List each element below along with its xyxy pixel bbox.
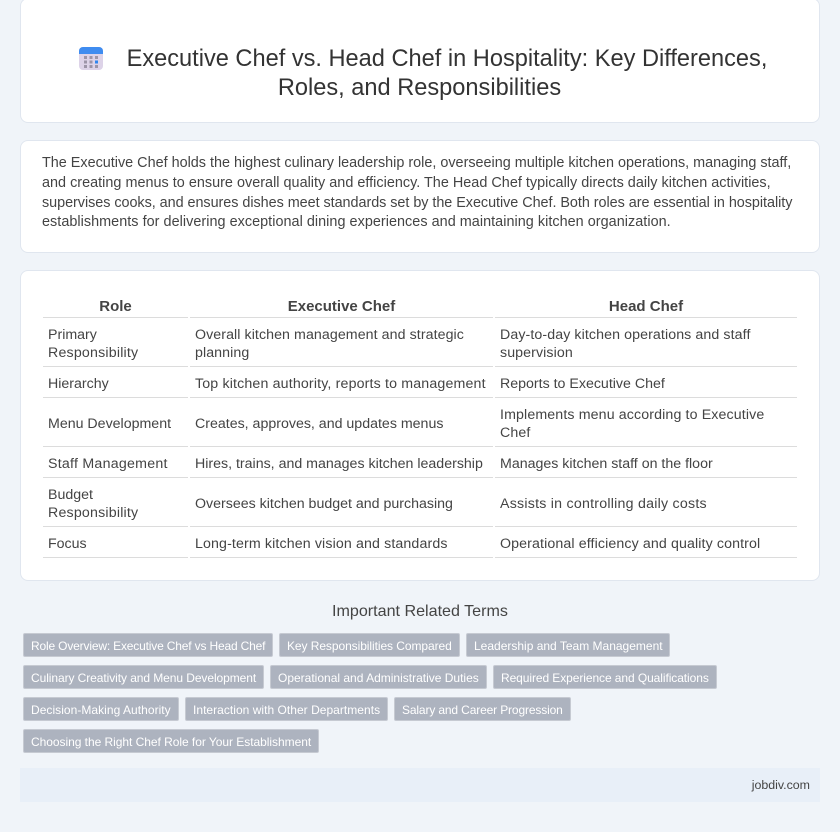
Head Chef: Menu Development: Chef — [500, 425, 530, 441]
related terms heading: Important Related Terms — [332, 602, 508, 620]
Executive Chef: Primary Responsibility: Overall kitchen management and strategic — [195, 327, 464, 343]
row: Focus: Focus — [48, 536, 87, 552]
tag — [279, 633, 460, 657]
Head Chef: Menu Development — [500, 407, 764, 441]
row: Primary Responsibility: Responsibility — [48, 345, 138, 361]
comparison table card — [20, 270, 820, 581]
tag — [270, 665, 487, 689]
Executive Chef: Hierarchy: Top kitchen authority, reports to management — [195, 376, 486, 392]
title: Executive Chef vs. Head Chef in Hospitality: Key Differences, — [127, 46, 767, 72]
intro text — [42, 155, 792, 230]
tag — [23, 665, 264, 689]
Executive Chef: Primary Responsibility: planning — [195, 345, 249, 361]
tag: Role Overview: Executive Chef vs Head Chef — [31, 639, 265, 653]
tag: Decision-Making Authority — [31, 703, 171, 717]
title — [127, 46, 767, 101]
tag: Culinary Creativity and Menu Development — [31, 671, 256, 685]
row: Budget Responsibility: Responsibility — [48, 505, 138, 521]
Head Chef: Menu Development: Implements menu according to Executive — [500, 407, 764, 423]
Head Chef: Focus: Operational efficiency and quality control — [500, 536, 760, 552]
tag — [185, 697, 388, 721]
table header: Role: Role — [99, 298, 132, 315]
Executive Chef: Primary Responsibility — [195, 327, 464, 361]
row: Primary Responsibility — [48, 327, 138, 361]
footer source: jobdiv.com — [752, 778, 810, 792]
tag — [23, 697, 179, 721]
intro text: The Executive Chef holds the highest culinary leadership role, overseeing multiple kitchen operations, managing staff, — [42, 155, 791, 171]
row: Staff Management: Staff Management — [48, 456, 168, 472]
Head Chef: Budget Responsibility: Assists in controlling daily costs — [500, 496, 707, 512]
tag — [493, 665, 717, 689]
Head Chef: Primary Responsibility: supervision — [500, 345, 573, 361]
row: Primary Responsibility: Primary — [48, 327, 97, 343]
title: Roles, and Responsibilities — [278, 75, 561, 101]
row: Hierarchy: Hierarchy — [48, 376, 109, 392]
Executive Chef: Menu Development: Creates, approves, and updates menus — [195, 416, 443, 432]
tag: Operational and Administrative Duties — [278, 671, 479, 685]
tag: Required Experience and Qualifications — [501, 671, 709, 685]
tag — [23, 633, 273, 657]
footer bar — [20, 768, 820, 802]
Head Chef: Hierarchy: Reports to Executive Chef — [500, 376, 665, 392]
tag — [466, 633, 670, 657]
Head Chef: Primary Responsibility — [500, 327, 750, 361]
intro text: and creating menus to ensure overall quality and efficiency. The Head Chef typically directs daily kitchen activities, — [42, 175, 771, 191]
row: Budget Responsibility — [48, 487, 138, 521]
table header: Head Chef: Head Chef — [609, 298, 683, 315]
tag — [394, 697, 571, 721]
tag: Key Responsibilities Compared — [287, 639, 452, 653]
tag: Choosing the Right Chef Role for Your Establishment — [31, 735, 311, 749]
tag: Salary and Career Progression — [402, 703, 563, 717]
intro card — [20, 140, 820, 253]
row: Menu Development: Menu Development — [48, 416, 171, 432]
intro text: establishments for delivering exceptional dining experiences and maintaining kitchen organization. — [42, 214, 671, 230]
Executive Chef: Focus: Long-term kitchen vision and standards — [195, 536, 448, 552]
row: Budget Responsibility: Budget — [48, 487, 93, 503]
Head Chef: Primary Responsibility: Day-to-day kitchen operations and staff — [500, 327, 750, 343]
tag: Interaction with Other Departments — [193, 703, 380, 717]
table header: Executive Chef: Executive Chef — [288, 298, 395, 315]
header card — [20, 0, 820, 123]
Head Chef: Staff Management: Manages kitchen staff on the floor — [500, 456, 713, 472]
Executive Chef: Staff Management: Hires, trains, and manages kitchen leadership — [195, 456, 483, 472]
Executive Chef: Budget Responsibility: Oversees kitchen budget and purchasing — [195, 496, 453, 512]
icon: calendar — [79, 47, 103, 70]
intro text: supervises cooks, and ensures dishes meet standards set by the Executive Chef. Both roles are essential in hospitality — [42, 195, 792, 211]
tag — [23, 729, 319, 753]
tag: Leadership and Team Management — [474, 639, 663, 653]
